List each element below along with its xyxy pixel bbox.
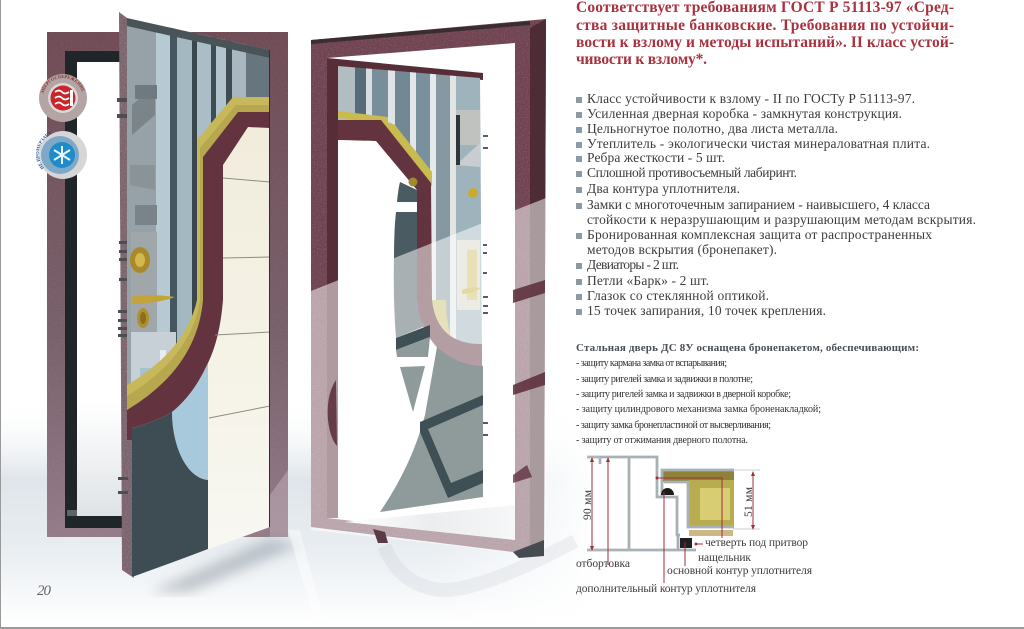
armor package list: - защиту цилиндрового механизма замка броненакладкой; bbox=[576, 404, 821, 415]
badge: no freezing bbox=[36, 131, 87, 179]
inner ribs bbox=[338, 60, 483, 360]
red dimension lines bbox=[592, 458, 753, 583]
armor package subheading: Стальная дверь ДС 8У оснащена бронепакетом, обеспечивающим: bbox=[576, 342, 919, 354]
diagram labels: 90 мм bbox=[582, 489, 594, 520]
frame cross-section diagram bbox=[576, 457, 813, 595]
armor package list bbox=[576, 358, 821, 446]
feature list: Два контура уплотнителя. bbox=[587, 181, 740, 196]
brown arc band bbox=[127, 112, 270, 440]
bolts on door edge bbox=[117, 98, 128, 494]
fade overlay bbox=[311, 198, 546, 556]
armor package list: - защиту ригелей замка и задвижки в полотне; bbox=[576, 374, 753, 385]
glass insert top bbox=[394, 182, 425, 338]
steel profile bbox=[587, 457, 734, 550]
diagram labels bbox=[576, 486, 813, 595]
diagram labels: 51 мм bbox=[743, 486, 755, 517]
lock cylinder and handle bbox=[130, 247, 175, 328]
left door frame bbox=[47, 32, 288, 537]
feature list: Петли «Барк» - 2 шт. bbox=[587, 273, 709, 288]
arrowheads bbox=[590, 457, 755, 551]
extension lines bbox=[587, 457, 760, 550]
feature list: Утеплитель - экологически чистая минераловатная плита. bbox=[587, 136, 930, 151]
feature list: Замки с многоточечным запиранием - наивысшего, 4 класса bbox=[587, 197, 930, 212]
white inner panel bbox=[132, 127, 270, 580]
door shadow on floor bbox=[150, 538, 300, 592]
title bbox=[576, 0, 954, 68]
left door leaf with cut-away bbox=[117, 12, 271, 580]
feature list: Класс устойчивости к взлому - II по ГОСТу Р 51113-97. bbox=[587, 91, 915, 106]
diagram labels: основной контур уплотнителя bbox=[667, 565, 813, 577]
badge: no freezing: НЕ ПРОМЕРЗАЕТ bbox=[36, 132, 51, 170]
feature list: 15 точек запирания, 10 точек крепления. bbox=[587, 303, 826, 318]
feature list: Цельногнутое полотно, два листа металла. bbox=[587, 121, 838, 136]
armor package list: - защиту замка бронепластиной от высверливания; bbox=[576, 420, 771, 431]
right door illustration bbox=[288, 19, 575, 626]
panel seams bbox=[209, 178, 270, 418]
ribs bbox=[127, 18, 270, 385]
diagram labels: нащельник bbox=[698, 552, 751, 564]
feature list: Девиаторы - 2 шт. bbox=[587, 257, 679, 272]
insulation section bbox=[663, 471, 734, 536]
insulation knob bbox=[408, 178, 418, 186]
dark stripes on frame bbox=[328, 280, 545, 483]
top insulation bbox=[338, 111, 432, 186]
diagram labels: отбортовка bbox=[576, 558, 630, 570]
feature list: Глазок со стеклянной оптикой. bbox=[587, 288, 769, 303]
floor swoosh bbox=[288, 529, 575, 626]
bolts on right door bbox=[483, 135, 488, 436]
blue glass panel bbox=[172, 363, 208, 480]
title: ства защитные банковские. Требования по устойчи- bbox=[576, 17, 954, 34]
armor package list: - защиту кармана замка от вспарывания; bbox=[576, 358, 727, 369]
mineral wool insulation bbox=[127, 97, 270, 430]
brown arc band bbox=[338, 120, 483, 366]
title: чивости к взлому*. bbox=[576, 51, 707, 68]
armor package list: - защиту ригелей замка и задвижки в дверной коробке; bbox=[576, 389, 791, 400]
armor package list: - защиту от отжимания дверного полотна. bbox=[576, 435, 748, 446]
dark lower panel bbox=[132, 412, 208, 578]
feature list: Бронированная комплексная защита от распространенных bbox=[587, 227, 932, 242]
badge: energy saving: ЭНЕРГОСБЕРЕЖЕНИЕ bbox=[40, 75, 85, 94]
feature list: Ребра жесткости - 5 шт. bbox=[587, 150, 725, 165]
right door frame bbox=[311, 19, 546, 556]
page number: 20 bbox=[37, 583, 52, 599]
feature list bbox=[576, 91, 976, 318]
right door leaf interior bbox=[327, 58, 483, 518]
feature list: Сплошной противосъемный лабиринт. bbox=[587, 165, 797, 180]
diagram labels: дополнительный контур уплотнителя bbox=[576, 583, 757, 595]
feature list: стойкости к неразрушающим и разрушающим методам вскрытия. bbox=[587, 212, 976, 227]
feature list: методов вскрытия (бронепакет). bbox=[587, 242, 777, 257]
seals bbox=[661, 488, 674, 495]
diagram labels: четверть под притвор bbox=[705, 537, 808, 549]
feature list: Усиленная дверная коробка - замкнутая конструкция. bbox=[587, 106, 902, 121]
title: вости к взлому и методы испытаний». II класс устой- bbox=[576, 34, 954, 51]
list bullets bbox=[576, 97, 582, 315]
white door panel bbox=[338, 140, 437, 360]
lower gray panel bbox=[380, 325, 483, 512]
badge: energy saving bbox=[39, 74, 87, 122]
